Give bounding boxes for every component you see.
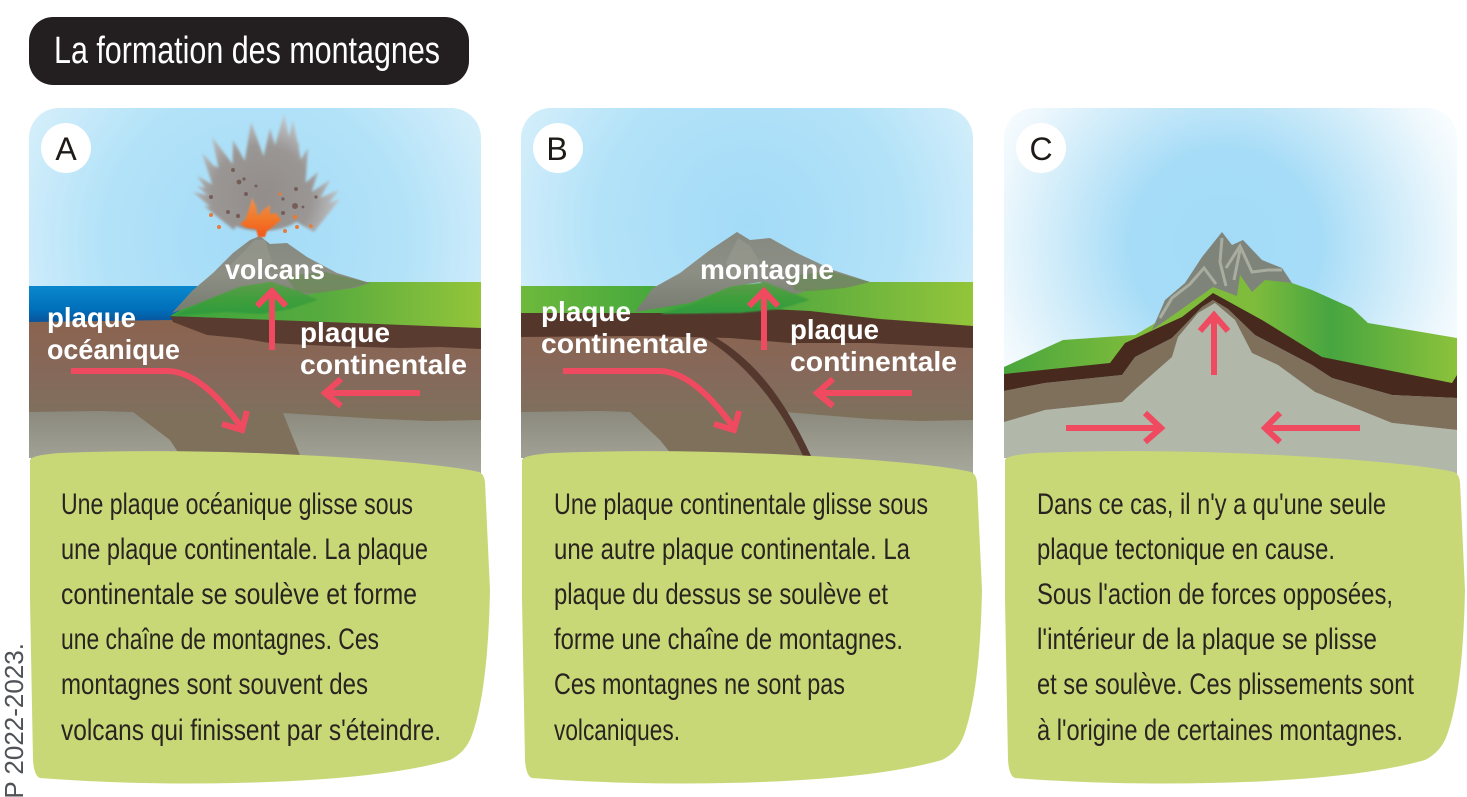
text block A [30, 451, 490, 783]
text block A: continentale se soulève et forme [61, 578, 417, 611]
text block B: une autre plaque continentale. La [554, 533, 910, 566]
text block A: volcans qui finissent par s'éteindre. [61, 714, 441, 747]
badge A [41, 123, 91, 173]
text block B: forme une chaîne de montagnes. [554, 623, 903, 656]
text block B: Une plaque continentale glisse sous [554, 488, 928, 521]
illustration B [521, 108, 973, 474]
label: plaque continentale: plaque [300, 317, 390, 348]
badge C: C [1029, 131, 1053, 167]
text block A: Une plaque océanique glisse sous [61, 488, 413, 521]
panel: C plissement [1004, 108, 1465, 783]
arrows B [563, 291, 912, 430]
panel: B collision continentale [521, 108, 982, 783]
label: plaque continentale gauche: plaque [541, 296, 631, 327]
text block B: plaque du dessus se soulève et [554, 578, 889, 611]
label: plaque continentale: continentale [300, 349, 467, 380]
badge A: A [55, 131, 77, 167]
text block C: l'intérieur de la plaque se plisse [1037, 623, 1377, 656]
title: La formation des montagnes [54, 30, 440, 72]
icon: volcan [172, 236, 370, 316]
label: plaque continentale [300, 317, 467, 380]
label: volcans: volcans [225, 254, 325, 285]
text block B [522, 451, 982, 783]
arrows C [1066, 315, 1360, 442]
text block C: plaque tectonique en cause. [1037, 533, 1335, 566]
icon: montagne plissee [1152, 232, 1292, 330]
icon: montagne [635, 232, 870, 314]
text block A: une plaque continentale. La plaque [61, 533, 428, 566]
text block A: une chaîne de montagnes. Ces [61, 623, 379, 656]
label: plaque oceanique: plaque [47, 302, 136, 333]
label: plaque continentale droite: continentale [790, 346, 957, 377]
text block B: volcaniques. [554, 714, 680, 747]
label: plaque continentale gauche: continentale [541, 328, 708, 359]
icon: plan de contact [703, 336, 811, 456]
illustration A [29, 108, 481, 474]
panel: A subduction oceanique [29, 108, 490, 783]
arrows A [71, 291, 420, 430]
label: plaque continentale gauche [541, 296, 708, 359]
title [29, 17, 469, 85]
label: plaque continentale droite [790, 314, 957, 377]
text block C [1005, 451, 1465, 783]
label: plaque continentale droite: plaque [790, 314, 879, 345]
icon: eruption [193, 114, 340, 237]
badge C [1016, 123, 1066, 173]
text block B: Ces montagnes ne sont pas [554, 668, 845, 701]
badge B [533, 123, 583, 173]
label: montagne: montagne [700, 254, 834, 285]
label: plaque oceanique [47, 302, 180, 365]
illustration C [1004, 108, 1457, 474]
text block A: montagnes sont souvent des [61, 668, 368, 701]
badge B: B [546, 131, 568, 167]
label: plaque oceanique: océanique [47, 334, 180, 365]
